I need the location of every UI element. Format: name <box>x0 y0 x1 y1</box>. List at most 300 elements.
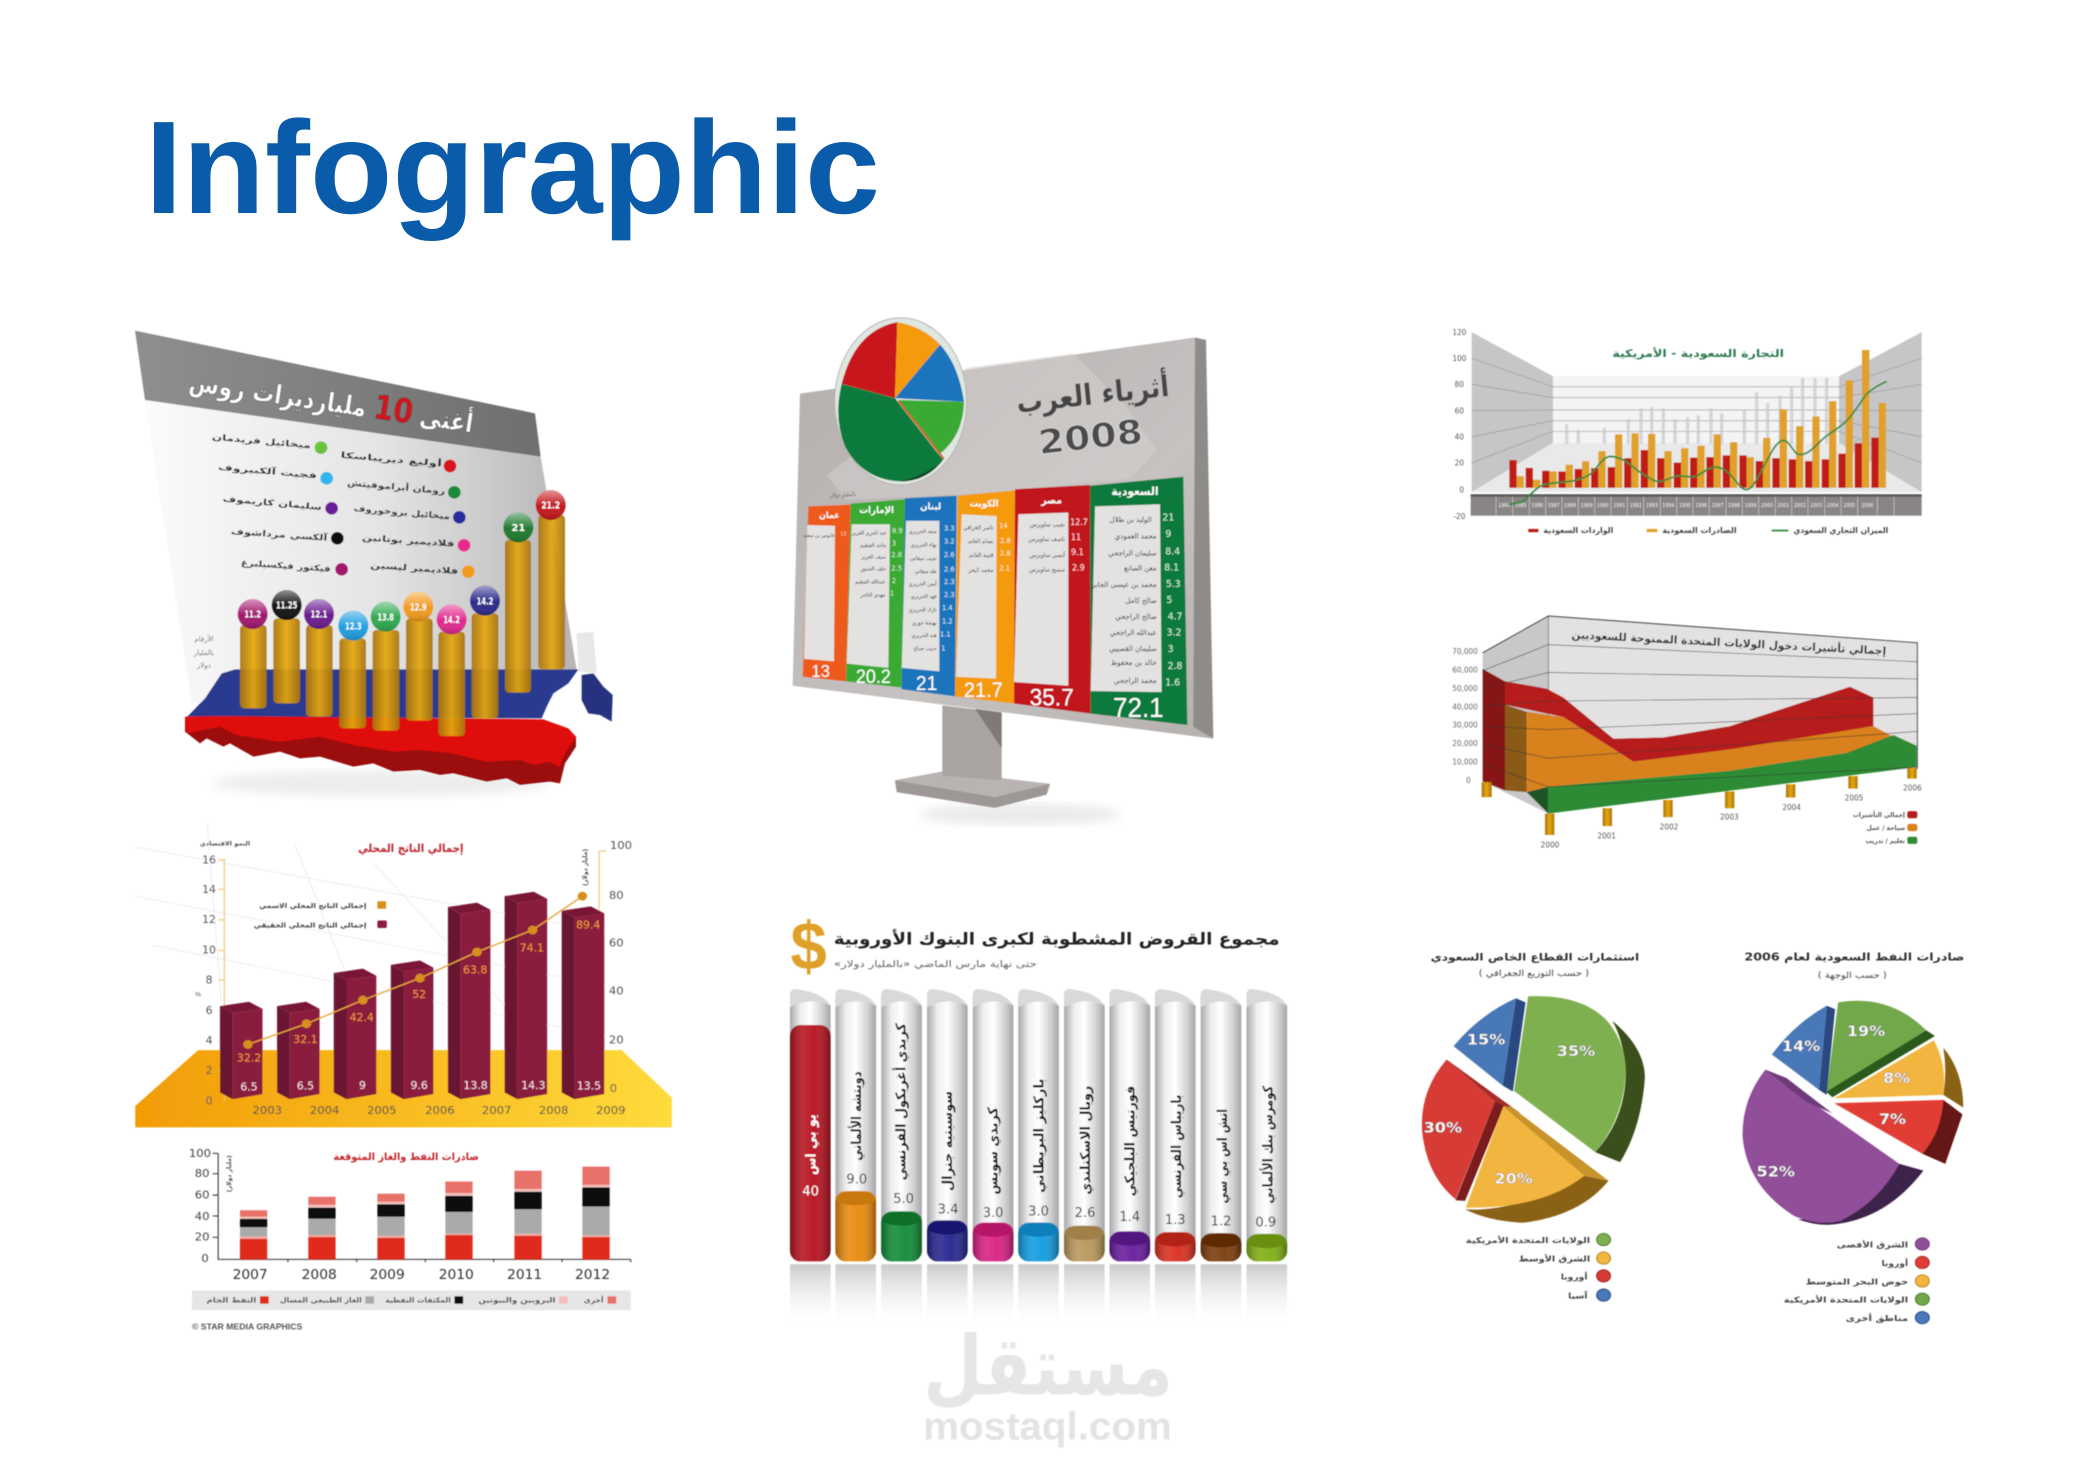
column: Emirates: عبدالله الفطيم <box>855 579 885 586</box>
column: Egypt: 11 <box>1071 532 1081 542</box>
legend: إجمالي الناتج المحلي الحقيقي <box>254 921 366 929</box>
y axis labels: 60 <box>1455 406 1464 416</box>
right pie legend: الشرق الأقصى <box>1837 1239 1908 1250</box>
right pie heading: صادرات النفط السعودية لعام 2006 <box>1744 950 1964 964</box>
column: Egypt: ناصف ساويرس <box>1028 537 1065 543</box>
stacked chart title: صادرات النفط والغاز المتوقعة <box>333 1151 479 1163</box>
column: Kuwait: 21.7 <box>964 679 1003 702</box>
real values: 13.5 <box>577 1081 601 1092</box>
right pie chart <box>1742 1001 1963 1225</box>
ball values: 21.2 <box>541 501 560 512</box>
left pie subheading: ( حسب التوزيع الجغرافي ) <box>1479 968 1589 979</box>
left axis labels: 4 <box>206 1035 213 1047</box>
years: 2008 <box>539 1104 568 1117</box>
right axis labels: 100 <box>610 839 632 852</box>
column: Kuwait: ناصر الخرافي <box>963 526 994 532</box>
bank names: دويتشه الألماني <box>847 1071 865 1161</box>
column: Egypt: 12.7 <box>1070 517 1088 527</box>
legend dots <box>315 441 475 578</box>
map shadow <box>213 770 547 797</box>
axis band <box>1471 494 1922 516</box>
column: Lebanon: 2.3 <box>944 591 955 599</box>
right axis labels: 80 <box>609 889 624 902</box>
panel: Saudi-US trade chart <box>1452 328 1922 535</box>
column: Saudi Arabia <box>1090 477 1187 725</box>
year labels: 2003 <box>1810 503 1822 509</box>
column: Lebanon: 1.4 <box>942 604 953 612</box>
note: بالمليار دولار <box>829 492 856 499</box>
column: Emirates <box>846 499 905 687</box>
real values <box>240 1080 601 1093</box>
map of Russia: blue band <box>187 669 578 718</box>
column: Emirates: 2 <box>892 577 896 585</box>
legend: إجمالي التأشيرات <box>1853 811 1905 819</box>
title: Infographic <box>145 94 880 241</box>
column: Emirates: 2.8 <box>891 551 902 559</box>
bank names: باركليز البريطاني <box>1032 1079 1047 1193</box>
values: 3.4 <box>938 1202 958 1218</box>
stacked chart legend: أخرى <box>584 1295 603 1305</box>
column: Oman: 13 <box>840 532 846 538</box>
ball values: 14.2 <box>477 596 493 607</box>
watermark url: mostaql.com <box>923 1406 1172 1448</box>
column: Saudi Arabia: محمد الراجحي <box>1114 676 1157 685</box>
left pie percentages: 20% <box>1494 1170 1533 1187</box>
panel: written-off loans at European banks <box>790 910 1287 1448</box>
right pie legend: مناطق أخرى <box>1846 1313 1908 1324</box>
bank names: رويال الاسكتلندي <box>1078 1086 1095 1195</box>
column: Emirates: 3 <box>892 540 896 548</box>
year labels: 2001 <box>1777 503 1789 509</box>
year labels: 2003 <box>1720 812 1739 821</box>
stacked chart legend <box>192 1291 631 1310</box>
real values: 9 <box>359 1080 366 1092</box>
left pie legend: الولايات المتحدة الأمريكية <box>1466 1235 1590 1246</box>
column: Saudi Arabia: 5.3 <box>1166 579 1181 590</box>
legs <box>1482 768 1917 835</box>
column: Kuwait: الكويت <box>969 499 999 510</box>
nominal values: 32.2 <box>237 1053 261 1065</box>
legend: billionaires: ميخائيل بروخوروف <box>353 503 451 522</box>
heading: مجموع القروض المشطوبة لكبرى البنوك الأوروبية <box>834 929 1280 949</box>
column: Emirates: ماجد الفطيم <box>860 543 886 549</box>
column: Lebanon: طه ميقاتي <box>915 569 937 575</box>
y labels: 60,000 <box>1452 665 1478 675</box>
y labels: 20,000 <box>1452 739 1478 748</box>
values <box>802 1172 1276 1230</box>
title banner <box>135 331 541 457</box>
column: Lebanon: 2.6 <box>944 565 955 573</box>
column: Lebanon: 3.2 <box>944 537 955 546</box>
column: Saudi Arabia: سليمان القصيبي <box>1109 644 1157 653</box>
column: Lebanon: 3.3 <box>944 524 955 532</box>
stacked chart unit: (مليار دولار) <box>226 1155 233 1192</box>
stacked chart years: 2008 <box>302 1268 337 1283</box>
real values: 9.6 <box>411 1080 428 1092</box>
right pie legend: حوض البحر المتوسط <box>1806 1278 1908 1287</box>
column: Egypt: 2.9 <box>1072 562 1085 573</box>
year labels: 1986 <box>1531 503 1543 509</box>
chart title: التجارة السعودية - الأمريكية <box>1612 347 1784 360</box>
values: 0.9 <box>1255 1215 1276 1230</box>
year labels: 2000 <box>1541 840 1559 850</box>
year labels <box>1498 503 1873 509</box>
years: 2005 <box>367 1104 397 1117</box>
left pie legend <box>1466 1234 1610 1301</box>
chart title: إجمالي الناتج المحلي <box>358 842 464 855</box>
import bars <box>1509 437 1879 488</box>
bank names: سوسيتيه جنرال <box>940 1091 956 1191</box>
column: Oman: 13 <box>811 661 830 681</box>
year labels: 1995 <box>1679 503 1691 509</box>
axis captions <box>195 841 589 999</box>
year labels: 1992 <box>1630 503 1642 509</box>
column: Saudi Arabia: صالح الراجحي <box>1115 612 1157 621</box>
column: Kuwait <box>955 490 1015 704</box>
year labels: 1996 <box>1695 503 1707 509</box>
far-east island <box>582 673 613 722</box>
column: Lebanon: 1.1 <box>940 630 951 638</box>
year labels: 2002 <box>1794 503 1806 509</box>
chart box <box>1483 616 1917 814</box>
axis captions: النمو الاقتصادي <box>200 841 250 848</box>
stacked chart y labels: 20 <box>195 1231 210 1244</box>
bank names: كريدي أغريكول الفرنسي <box>892 1022 911 1180</box>
years <box>252 1104 626 1117</box>
year labels: 2002 <box>1660 822 1678 832</box>
year labels <box>1541 783 1922 850</box>
legend: إجمالي الناتج المحلي الاسمي <box>259 901 366 910</box>
bank names: باريباس الفرنسي <box>1169 1095 1185 1198</box>
subheading: حتى نهاية مارس الماضي «بالمليار دولار» <box>834 960 1037 970</box>
column: Saudi Arabia: خالد بن محفوظ <box>1111 658 1157 667</box>
year labels: 1984 <box>1498 503 1510 509</box>
panel: US visas area chart <box>1452 616 1922 850</box>
unit note: دولار <box>196 661 211 669</box>
year labels: 1987 <box>1548 503 1560 509</box>
nominal values: 52 <box>412 989 426 1001</box>
left pie percentages: 15% <box>1467 1031 1505 1048</box>
legend: الواردات السعودية <box>1543 526 1613 535</box>
stacked chart years: 2007 <box>233 1268 268 1283</box>
legend: billionaires: آلكسي مرداشوف <box>231 525 329 544</box>
right pie legend: أوروبا <box>1881 1257 1908 1269</box>
column: Saudi Arabia: 1.6 <box>1165 677 1180 689</box>
stacked chart years: 2009 <box>370 1268 405 1283</box>
y axis labels: 40 <box>1455 432 1464 442</box>
column: Saudi Arabia: 3 <box>1168 644 1174 655</box>
year labels: 2006 <box>1861 503 1873 509</box>
values: 1.2 <box>1211 1214 1231 1229</box>
column: Kuwait: بسام الغانم <box>968 539 994 545</box>
ball values: 11.2 <box>244 610 261 621</box>
column: Lebanon: سعد الحريري <box>909 529 937 535</box>
y axis labels: 0 <box>1459 485 1464 495</box>
legend: billionaires: سليمان كاريموف <box>222 493 322 513</box>
left pie legend: آسيا <box>1568 1290 1589 1301</box>
legend: billionaires: ميخائيل فريدمان <box>211 432 311 451</box>
y axis labels: -20 <box>1453 512 1465 521</box>
values: 1.3 <box>1165 1213 1186 1228</box>
area: education / training <box>1527 735 1917 814</box>
column: Egypt: سميح ساويرس <box>1029 567 1065 573</box>
heading: أثرياء العرب <box>1015 367 1171 420</box>
column: Emirates: 1 <box>890 590 894 598</box>
bank names: اتش اس بي سي <box>1215 1109 1231 1204</box>
right pie legend <box>1784 1238 1929 1324</box>
year labels: 1988 <box>1564 503 1576 509</box>
unit note: بالمليار <box>193 649 214 657</box>
ball values: 12.1 <box>311 610 327 621</box>
year labels: 1985 <box>1515 503 1527 509</box>
legend: الميزان التجاري السعودي <box>1793 526 1888 535</box>
years: 2004 <box>310 1104 339 1117</box>
grid lines <box>1483 645 1917 787</box>
legend: billionaires: فلاديمير بوتانين <box>362 532 455 550</box>
floor <box>135 1050 672 1127</box>
column: Kuwait: 2.8 <box>1000 550 1011 558</box>
cylinders <box>240 515 565 736</box>
column: Lebanon: حبيب صباغ <box>914 646 937 652</box>
column: Saudi Arabia: 8.4 <box>1165 546 1180 557</box>
ball values: 12.3 <box>345 621 362 632</box>
y labels <box>1452 647 1478 785</box>
year labels: 2006 <box>1903 783 1922 792</box>
year labels: 2004 <box>1782 803 1801 812</box>
balance line <box>1508 381 1887 505</box>
banner title text: أغنى 10 مليارديرات روس <box>187 360 476 441</box>
column: Lebanon: بهاء الحريري <box>911 542 937 548</box>
stacked chart y labels: 60 <box>195 1189 210 1201</box>
year labels: 1997 <box>1712 503 1724 509</box>
stacked chart years: 2010 <box>439 1268 474 1283</box>
year labels: 1999 <box>1745 503 1757 509</box>
legend: billionaires <box>211 432 459 577</box>
stacked chart years <box>233 1268 610 1283</box>
left axis labels: 12 <box>202 915 216 926</box>
legend: billionaires: فيكتور فيكسيلبرغ <box>241 557 331 575</box>
column: Emirates: سيف الغرير <box>860 554 886 561</box>
year: 2008 <box>1036 412 1145 463</box>
right axis labels: 20 <box>609 1034 624 1047</box>
right pie percentages <box>1757 1023 1910 1180</box>
column: Kuwait: 14 <box>999 522 1008 530</box>
year labels: 2004 <box>1827 503 1839 509</box>
stacked chart y labels: 0 <box>201 1252 209 1265</box>
stacked chart y labels: 40 <box>195 1210 210 1223</box>
faint grid <box>135 823 607 1101</box>
stacked chart legend: الغاز الطبيعي المسال <box>280 1296 362 1305</box>
silver cylinders <box>790 989 1287 1261</box>
years: 2009 <box>596 1104 626 1117</box>
year labels: 1990 <box>1597 503 1609 509</box>
left pie heading: استثمارات القطاع الخاص السعودي <box>1431 951 1639 963</box>
left pie legend: أوروبا <box>1561 1271 1588 1282</box>
legend: billionaires: فلاديمير ليسين <box>370 560 459 577</box>
year labels: 1998 <box>1728 503 1740 509</box>
reflections <box>790 1264 1287 1329</box>
monitor side <box>1188 337 1213 739</box>
right pie percentages: 7% <box>1879 1111 1906 1128</box>
left pie percentages: 30% <box>1424 1119 1462 1136</box>
unit note <box>193 635 214 669</box>
credit: © STAR MEDIA GRAPHICS <box>192 1322 303 1331</box>
real values: 13.8 <box>463 1080 488 1092</box>
unit note: الأرقام <box>194 635 214 644</box>
real values: 6.5 <box>240 1082 258 1093</box>
years: 2007 <box>482 1104 511 1117</box>
y axis labels: 80 <box>1455 380 1464 389</box>
year labels: 2005 <box>1843 503 1855 509</box>
column: Egypt <box>1014 485 1091 714</box>
column: Saudi Arabia: محمد العمودي <box>1115 531 1157 541</box>
column: Emirates: 2.5 <box>891 565 902 573</box>
y labels: 40,000 <box>1452 702 1478 711</box>
monitor stand <box>895 705 1050 808</box>
legend: billionaires: فجيت آلكبيروف <box>217 461 317 481</box>
real values: 6.5 <box>297 1081 314 1092</box>
values: 3.0 <box>1028 1205 1049 1220</box>
year labels: 1989 <box>1581 503 1593 509</box>
panel: richest Arabs monitor <box>793 318 1213 825</box>
right pie percentages: 8% <box>1883 1070 1910 1087</box>
real values: 14.3 <box>521 1080 545 1092</box>
legend <box>254 901 387 929</box>
column: Emirates: خلف الحبتور <box>859 567 886 573</box>
column: Lebanon: لبنان <box>920 502 941 512</box>
nominal values <box>237 920 601 1065</box>
right axis labels: 0 <box>610 1083 617 1095</box>
dollar icon: $ <box>790 910 827 985</box>
column: Egypt: مصر <box>1040 495 1062 507</box>
y labels: 30,000 <box>1452 720 1478 730</box>
column: Kuwait: قتيبة الغانم <box>969 553 994 559</box>
bank names: فورتيس البلجيكي <box>1123 1086 1139 1196</box>
panel: richest Russian billionaires <box>135 331 613 797</box>
watermark logo: مستقل <box>923 1319 1173 1415</box>
panel: GDP and exports <box>135 823 672 1331</box>
values: 5.0 <box>893 1192 914 1207</box>
left axis labels: 16 <box>202 855 216 866</box>
ball values: 14.2 <box>443 615 460 626</box>
column: Saudi Arabia: محمد بن عيسى الجابر <box>1091 580 1157 589</box>
year labels: 2001 <box>1597 831 1616 841</box>
column: Saudi Arabia: سليمان الراجحي <box>1108 548 1157 557</box>
column: Oman: قابوس بن سعيد <box>803 533 834 539</box>
stacked chart legend: المكثفات النفطية <box>385 1296 451 1305</box>
stacked chart years: 2012 <box>575 1268 610 1283</box>
column: Kuwait: 2.8 <box>1000 537 1011 545</box>
ghost reflection bars <box>1565 378 1828 444</box>
axis captions: (مليار دولار) <box>582 849 589 886</box>
panel: two pie charts <box>1422 950 1964 1324</box>
year labels: 1993 <box>1646 503 1658 509</box>
value balls <box>238 490 566 641</box>
right pie subheading: ( حسب الوجهة ) <box>1818 970 1887 981</box>
column: Emirates: 20.2 <box>856 665 891 687</box>
right axis labels <box>609 839 632 1095</box>
right axis <box>599 851 606 1087</box>
bars <box>220 892 604 1099</box>
left axis labels: 6 <box>206 1005 213 1017</box>
stacked chart y labels: 100 <box>189 1148 211 1160</box>
nominal values: 63.8 <box>463 965 487 977</box>
bank names: كريدي سويس <box>986 1106 1002 1195</box>
y axis labels: 20 <box>1455 458 1464 468</box>
y axis labels: 100 <box>1452 354 1466 363</box>
column: Egypt: 35.7 <box>1030 684 1074 711</box>
monitor face <box>793 337 1213 739</box>
column: Lebanon: بهيجة خوري <box>912 620 937 626</box>
legend <box>1528 526 1888 535</box>
stacked chart legend: النفط الخام <box>207 1296 256 1305</box>
years: 2003 <box>252 1104 282 1117</box>
values: 2.6 <box>1075 1206 1095 1221</box>
column: Saudi Arabia: 9 <box>1165 529 1171 540</box>
column: Lebanon: 21 <box>916 672 937 695</box>
column: Lebanon: 1.2 <box>942 617 953 626</box>
stacked chart axes <box>213 1153 631 1262</box>
nominal values: 74.1 <box>520 943 544 954</box>
bank names: يو بي اس <box>804 1114 819 1175</box>
column: Saudi Arabia: 5 <box>1166 595 1172 606</box>
billboard panel <box>145 400 577 703</box>
bank names <box>804 1022 1276 1204</box>
column: Lebanon: 2.3 <box>944 578 955 586</box>
column: Lebanon <box>902 496 957 696</box>
column: Emirates: مهدي التاجر <box>860 592 886 598</box>
column: Emirates: 8.9 <box>892 527 903 535</box>
stacked chart legend: البروبين والبيوتين <box>478 1296 556 1305</box>
right pie percentages: 52% <box>1757 1163 1795 1180</box>
column: Lebanon: هند الحريري <box>911 633 937 639</box>
stand shadow <box>920 804 1120 825</box>
column: Lebanon: نجيب ميقاتي <box>910 556 937 562</box>
column: Saudi Arabia: صالح كامل <box>1125 596 1157 605</box>
column: Saudi Arabia: السعودية <box>1111 485 1159 498</box>
column: Egypt: نجيب ساويرس <box>1030 522 1065 528</box>
right pie percentages: 14% <box>1782 1038 1820 1055</box>
column: Egypt: أنسي ساويرس <box>1030 551 1065 559</box>
left axis labels: 2 <box>206 1065 213 1077</box>
values: 40 <box>802 1185 819 1200</box>
left axis labels: 0 <box>206 1096 213 1107</box>
column: Lebanon: أيمن الحريري <box>909 580 937 588</box>
y labels: 0 <box>1466 776 1471 785</box>
left axis <box>218 859 224 1101</box>
pie chart <box>835 318 967 485</box>
nominal GDP line <box>243 892 587 1049</box>
column: Saudi Arabia: عبدالله الراجحي <box>1110 628 1157 637</box>
small region <box>577 632 597 673</box>
legend: الصادرات السعودية <box>1662 526 1737 535</box>
column: Emirates: عبد العزيز الغرير <box>851 530 887 536</box>
y labels: 10,000 <box>1452 757 1478 766</box>
map of Russia: red band <box>185 716 576 785</box>
legend: سياحة / عمل <box>1867 825 1905 832</box>
y labels: 70,000 <box>1452 647 1478 656</box>
column: Kuwait: 2.1 <box>999 565 1010 573</box>
chart title: إجمالي تأشيرات دخول الولايات المتحدة الممنوحة للسعوديين <box>1571 628 1886 658</box>
column: Saudi Arabia: 8.1 <box>1164 562 1179 573</box>
legend: billionaires: رومان أبراموفيتش <box>347 476 446 497</box>
column: Lebanon: 1 <box>941 645 945 653</box>
right pie legend: الولايات المتحدة الأمريكية <box>1784 1294 1908 1305</box>
column: Saudi Arabia: الوليد بن طلال <box>1110 515 1152 524</box>
year labels: 1994 <box>1662 503 1674 509</box>
column: Saudi Arabia: 4.7 <box>1168 611 1182 623</box>
right axis labels: 40 <box>609 985 624 998</box>
